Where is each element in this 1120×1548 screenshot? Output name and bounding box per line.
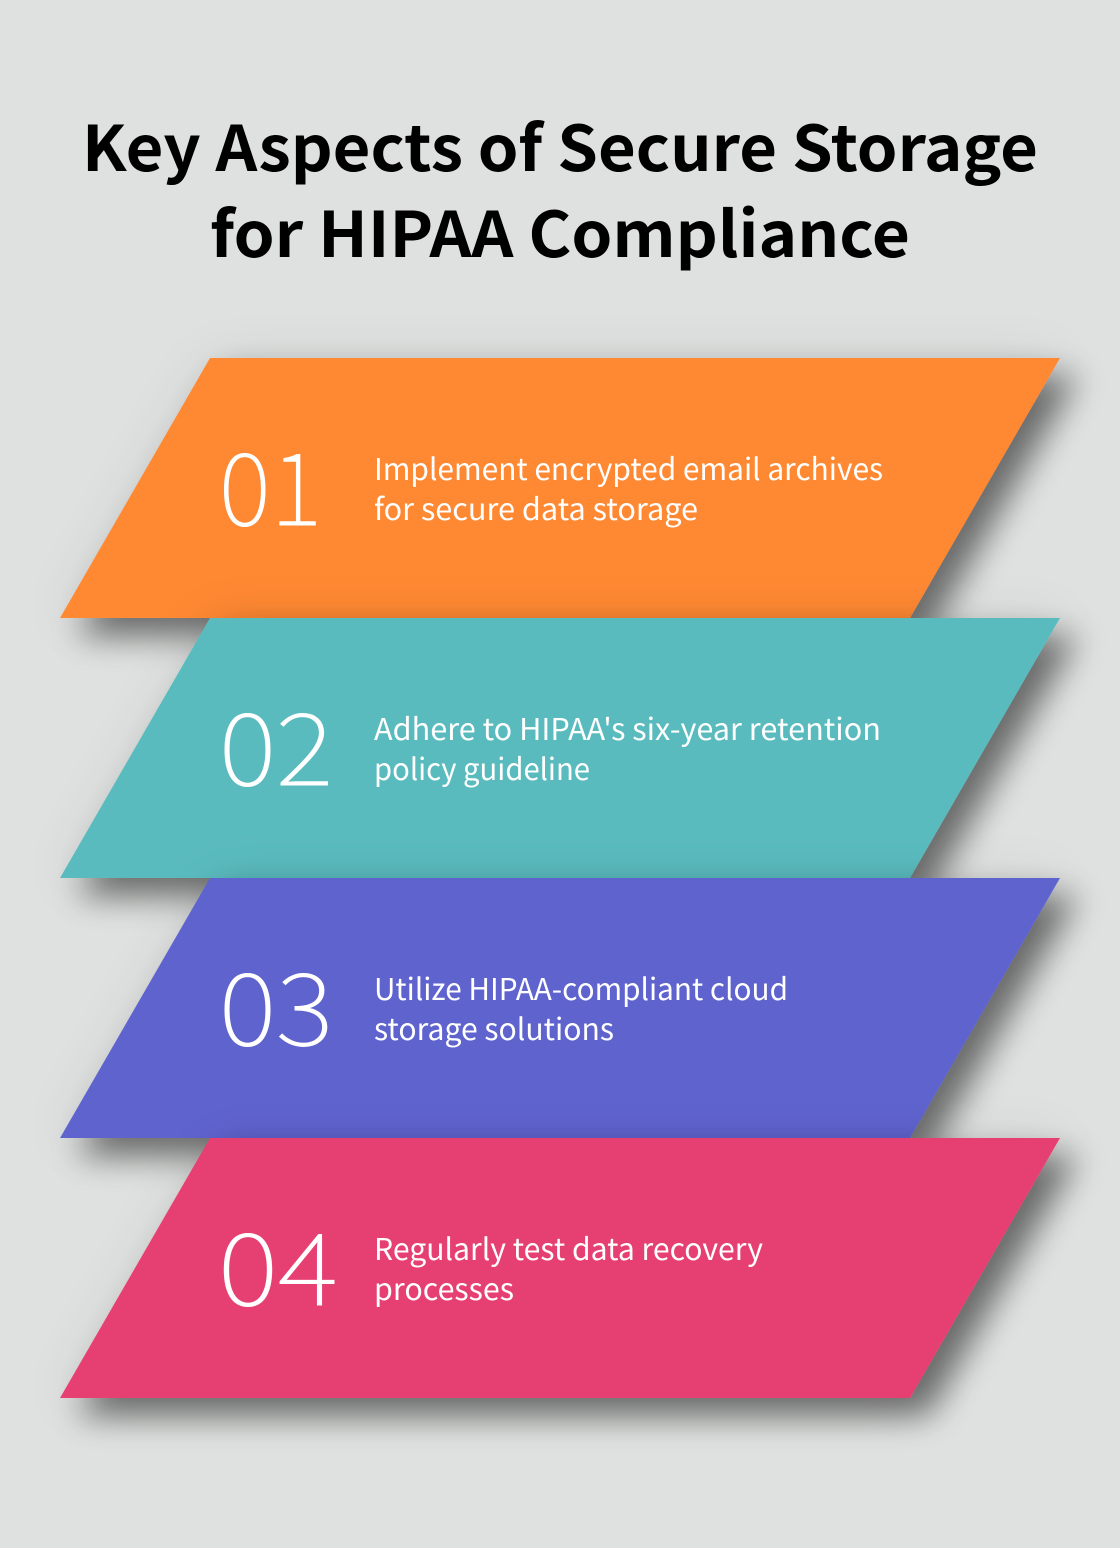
title: Key Aspects of Secure Storage — [82, 99, 1038, 190]
title: for HIPAA Compliance — [210, 185, 910, 276]
text: step 03 — [374, 965, 788, 1049]
indigo parallelogram — [60, 878, 1060, 1138]
panel: step 03 — [60, 878, 1060, 1138]
panel: step 04 — [60, 1138, 1060, 1398]
text: step 04: Regularly test data recovery — [374, 1225, 763, 1269]
number 04: 04 — [218, 1189, 338, 1334]
orange parallelogram — [60, 358, 1060, 618]
text: step 04 — [374, 1225, 763, 1309]
text: step 02: Adhere to HIPAA's six-year retention — [374, 705, 881, 749]
text: step 02 — [374, 705, 881, 789]
panel: step 01 — [60, 358, 1060, 618]
number 01: 01 — [219, 409, 322, 554]
text: step 01: for secure data storage — [374, 485, 698, 529]
text: step 01: Implement encrypted email archives — [374, 445, 883, 489]
text: step 03: Utilize HIPAA-compliant cloud — [374, 965, 788, 1009]
number 03: 03 — [219, 929, 333, 1074]
text: step 01 — [374, 445, 883, 529]
text: step 03: storage solutions — [374, 1005, 614, 1049]
text: step 04: processes — [374, 1265, 514, 1309]
number 02: 02 — [219, 669, 333, 814]
pink parallelogram — [60, 1138, 1060, 1398]
title — [82, 99, 1038, 276]
panel: step 02 — [60, 618, 1060, 878]
text: step 02: policy guideline — [374, 745, 590, 789]
teal parallelogram — [60, 618, 1060, 878]
